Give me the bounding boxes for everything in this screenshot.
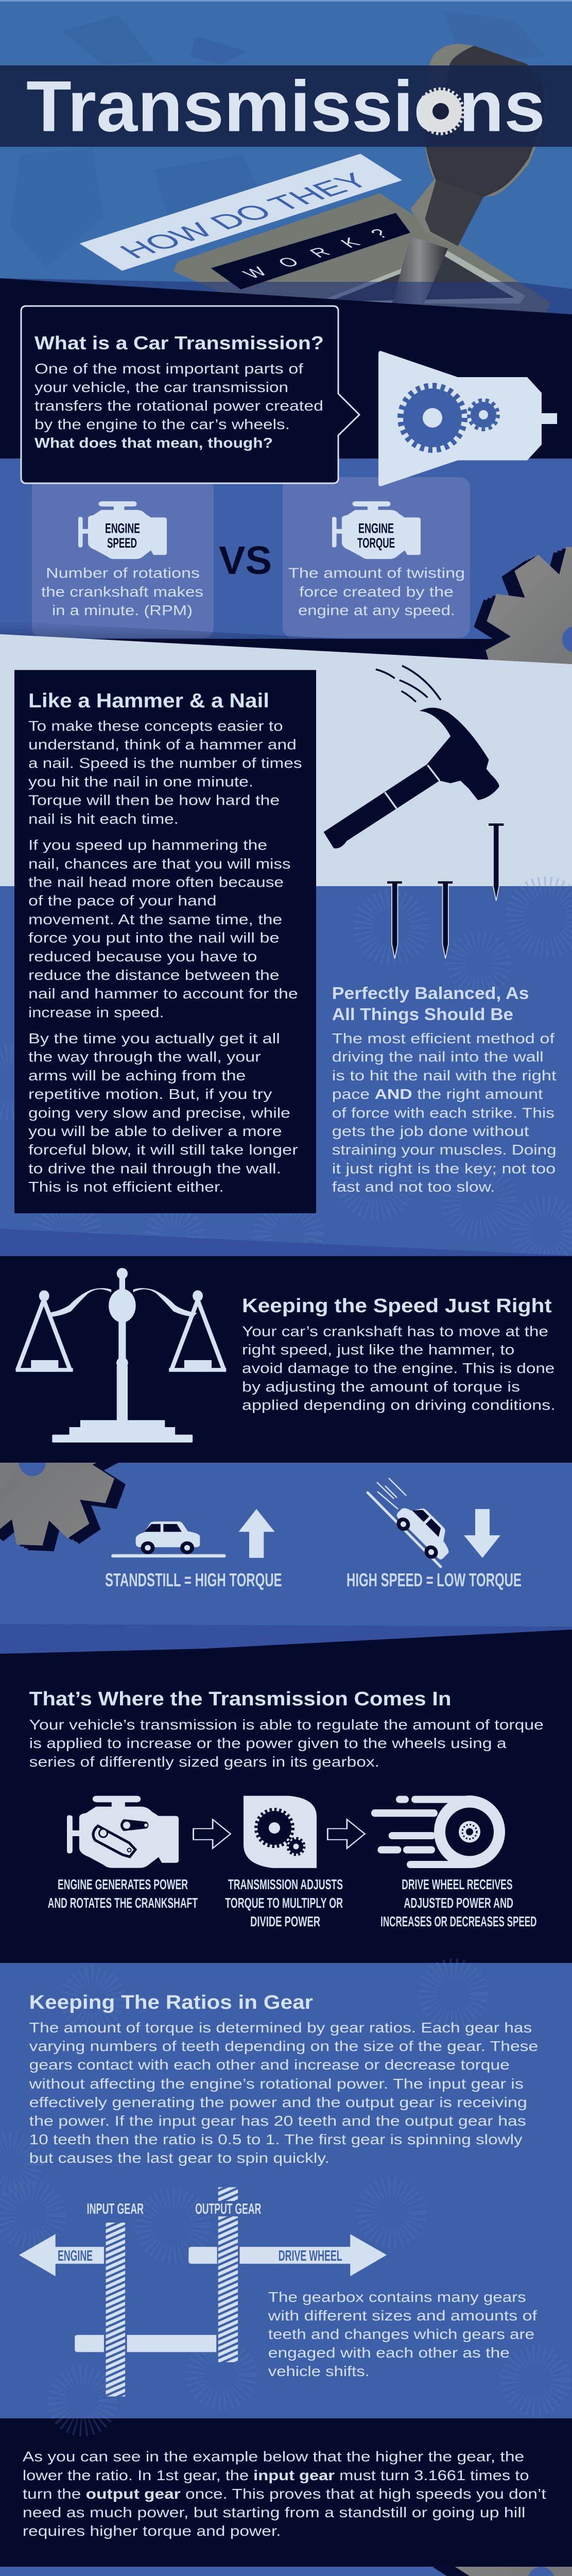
text: hammer paragraph three: arms will be aching from the bbox=[28, 1067, 246, 1083]
icon: transmission gears bbox=[244, 1796, 317, 1868]
text: perfectly balanced: Perfectly Balanced, As bbox=[332, 984, 529, 1003]
card: engine torque bbox=[283, 477, 470, 638]
card: engine speed bbox=[32, 477, 214, 638]
text: higher gear lower ratio: turn the output gear once. This proves that at high speeds you don’t bbox=[23, 2486, 546, 2502]
text: keeping the ratios in gear: the power. If the input gear has 20 teeth and the output gear has bbox=[29, 2113, 526, 2129]
diagram: input and output gears: OUTPUT GEAR bbox=[195, 2201, 261, 2217]
text: hammer paragraph three: forceful blow, it will still take longer bbox=[28, 1142, 298, 1158]
card: engine torque: engine at any speed. bbox=[298, 602, 455, 618]
caption: drive wheel receives: ADJUSTED POWER AND bbox=[404, 1895, 513, 1911]
card: engine torque: force created by the bbox=[299, 584, 454, 600]
subtitle: how do they bbox=[79, 154, 402, 271]
card: engine speed: in a minute. (RPM) bbox=[52, 602, 193, 618]
card: engine speed: Number of rotations bbox=[46, 565, 200, 581]
darker blue transition band bbox=[0, 1624, 572, 1664]
title band bbox=[0, 65, 572, 147]
text: keeping the speed just right: applied depending on driving conditions. bbox=[242, 1397, 556, 1413]
icon: metal gear right bbox=[474, 547, 572, 664]
arrow: transmission to drive wheel bbox=[327, 1820, 365, 1849]
blue speed vs torque section bbox=[0, 459, 572, 639]
callout: what is a car transmission: by the engine to the car’s wheels. bbox=[34, 416, 290, 432]
text: keeping the ratios in gear: 10 teeth then the ratio is 0.5 to 1. The first gear is spinning slowly bbox=[29, 2131, 523, 2147]
blue chart section bbox=[0, 2567, 572, 2576]
text: keeping the ratios in gear: gears contact with each other and increase or decrease torque bbox=[29, 2057, 510, 2073]
text: hammer paragraph three: This is not efficient either. bbox=[28, 1179, 224, 1195]
panel: like a hammer and a nail: Like a Hammer & a Nail bbox=[28, 690, 269, 712]
text: perfectly balanced: fast and not too slow. bbox=[332, 1179, 495, 1195]
diagram: input and output gears: ENGINE bbox=[58, 2248, 93, 2264]
card: engine speed: SPEED bbox=[107, 535, 137, 551]
text: perfectly balanced: driving the nail into the wall bbox=[332, 1049, 544, 1065]
text: hammer paragraph three: By the time you actually get it all bbox=[28, 1030, 280, 1046]
text: keeping the speed just right bbox=[242, 1295, 556, 1413]
callout: what is a car transmission: your vehicle, the car transmission bbox=[34, 379, 288, 395]
caption: engine generates power: ENGINE GENERATES POWER bbox=[58, 1876, 188, 1892]
subtitle: work bbox=[211, 213, 410, 290]
text: keeping the speed just right: by adjusting the amount of torque is bbox=[242, 1379, 520, 1395]
text: higher gear lower ratio: As you can see in the example below that the higher the gear, the bbox=[23, 2448, 524, 2465]
text: hammer paragraph three: you will be able to deliver a more bbox=[28, 1123, 282, 1139]
text: perfectly balanced: The most efficient method of bbox=[332, 1030, 554, 1046]
text: keeping the speed just right: right speed, just like the hammer, to bbox=[242, 1342, 514, 1358]
text: perfectly balanced bbox=[332, 984, 557, 1195]
callout: what is a car transmission: One of the most important parts of bbox=[34, 361, 303, 377]
text: keeping the speed just right: Your car’s crankshaft has to move at the bbox=[242, 1323, 548, 1339]
arrow: engine to transmission bbox=[194, 1820, 231, 1849]
text: hammer paragraph one: understand, think of a hammer and bbox=[28, 736, 297, 752]
text: gearbox description bbox=[268, 2289, 537, 2379]
text: hammer paragraph one: nail is hit each time. bbox=[28, 811, 179, 827]
text: perfectly balanced: is to hit the nail with the right bbox=[332, 1067, 557, 1083]
text: hammer paragraph one: To make these concepts easier to bbox=[28, 718, 283, 734]
icon: drive wheel bbox=[371, 1795, 505, 1868]
text: hammer paragraph one: Torque will then be how hard the bbox=[28, 792, 280, 808]
icon: gear shifter bbox=[175, 44, 549, 324]
icon: metal gear left bbox=[0, 1463, 126, 1551]
text: hammer paragraph one: a nail. Speed is the number of times bbox=[28, 755, 302, 771]
icon: engine with belts bbox=[67, 1796, 179, 1868]
gear bars and shafts bbox=[19, 2187, 387, 2397]
text: hammer paragraph three bbox=[28, 1030, 298, 1195]
text: higher gear lower ratio bbox=[23, 2448, 546, 2539]
caption: transmission adjusts bbox=[225, 1876, 343, 1929]
subtitle: work: WORK? bbox=[238, 226, 393, 281]
text: that's where the transmission comes in: Your vehicle’s transmission is able to regulate the amount of torque bbox=[29, 1717, 544, 1733]
caption: transmission adjusts: DIVIDE POWER bbox=[250, 1913, 320, 1929]
text: higher gear lower ratio: requires higher torque and power. bbox=[23, 2523, 281, 2539]
subtitle: how do they: HOW DO THEY bbox=[112, 168, 377, 263]
icon: car at high speed with down arrow bbox=[368, 1478, 500, 1567]
card: engine torque: The amount of twisting bbox=[288, 565, 465, 581]
text: keeping the ratios in gear: Keeping The Ratios in Gear bbox=[29, 1992, 313, 2013]
diagram: input and output gears bbox=[19, 2187, 387, 2397]
card: engine torque: TORQUE bbox=[357, 535, 395, 551]
vs label: VS bbox=[219, 538, 272, 583]
text: hammer paragraph two: movement. At the same time, the bbox=[28, 911, 282, 927]
navy transmission section bbox=[0, 1630, 572, 1963]
blue panel with gear pattern bbox=[0, 886, 572, 1260]
caption: drive wheel receives bbox=[380, 1876, 536, 1929]
icon: gearbox bbox=[378, 351, 557, 486]
blue torque section bbox=[0, 1463, 572, 1630]
text: perfectly balanced: it just right is the key; not too bbox=[332, 1160, 556, 1176]
darker blue transition band bbox=[0, 1229, 572, 1257]
text: hammer paragraph three: the way through the wall, your bbox=[28, 1049, 261, 1065]
card: engine speed: ENGINE bbox=[105, 520, 140, 536]
text: hammer paragraph two: If you speed up hammering the bbox=[28, 837, 267, 853]
icon: balance scale bbox=[15, 1268, 226, 1443]
text: hammer paragraph two: reduced because you have to bbox=[28, 948, 257, 964]
text: that's where the transmission comes in: That’s Where the Transmission Comes In bbox=[29, 1688, 452, 1710]
navy intro section bbox=[0, 278, 572, 459]
text: hammer paragraph two: of the pace of your hand bbox=[28, 892, 217, 908]
text: perfectly balanced: pace AND the right amount bbox=[332, 1086, 543, 1102]
callout: what is a car transmission bbox=[21, 306, 359, 483]
text: keeping the ratios in gear: The amount of torque is determined by gear ratios. Each gear has bbox=[29, 2020, 532, 2036]
text: perfectly balanced: straining your muscles. Doing bbox=[332, 1142, 557, 1158]
text: hammer paragraph two: force you put into the nail will be bbox=[28, 930, 279, 946]
panel: like a hammer and a nail bbox=[14, 670, 316, 1213]
text: higher gear lower ratio: need as much power, but starting from a standstill or going up hill bbox=[23, 2504, 525, 2520]
text: keeping the ratios in gear: without affecting the engine’s rotational power. The input gear is bbox=[28, 2076, 524, 2092]
text: that's where the transmission comes in: series of differently sized gears in its gearbox. bbox=[29, 1754, 379, 1770]
caption: engine generates power bbox=[48, 1876, 198, 1911]
diagram: input and output gears: INPUT GEAR bbox=[87, 2201, 144, 2217]
icon: metal gear chart corner bbox=[434, 2567, 572, 2576]
hero lower overlap bbox=[0, 278, 572, 319]
caption: transmission adjusts: TRANSMISSION ADJUSTS bbox=[228, 1876, 343, 1892]
text: hammer paragraph two: nail and hammer to account for the bbox=[28, 986, 298, 1002]
callout: what is a car transmission: transfers the rotational power created bbox=[34, 398, 323, 414]
text: keeping the speed just right: avoid damage to the engine. This is done bbox=[242, 1360, 554, 1376]
text: hammer paragraph three: repetitive motion. But, if you try bbox=[28, 1086, 272, 1102]
icon: hammer and nails bbox=[324, 666, 504, 959]
text: that's where the transmission comes in: is applied to increase or the power given to the wheels using a bbox=[29, 1735, 507, 1751]
text: hammer paragraph three: to drive the nail through the wall. bbox=[28, 1160, 281, 1176]
icon: gear in title bbox=[418, 89, 463, 134]
text: perfectly balanced: of force with each strike. This bbox=[332, 1105, 554, 1121]
text: hammer paragraph one: you hit the nail in one minute. bbox=[28, 774, 253, 789]
callout: what is a car transmission: What is a Car Transmission? bbox=[34, 332, 324, 353]
text: hammer paragraph three: going very slow and precise, while bbox=[28, 1105, 290, 1121]
diagram: input and output gears: DRIVE WHEEL bbox=[279, 2248, 342, 2264]
callout: what is a car transmission: What does that mean, though? bbox=[34, 435, 273, 451]
text: perfectly balanced: All Things Should Be bbox=[332, 1005, 513, 1024]
caption: transmission adjusts: TORQUE TO MULTIPLY OR bbox=[225, 1895, 343, 1911]
card: engine speed: the crankshaft makes bbox=[41, 584, 203, 600]
navy scale section bbox=[0, 1256, 572, 1463]
text: higher gear lower ratio: lower the ratio. In 1st gear, the input gear must turn 3.1661 times to bbox=[23, 2467, 529, 2483]
text: keeping the speed just right: Keeping the Speed Just Right bbox=[242, 1295, 552, 1317]
text: hammer paragraph two bbox=[28, 837, 298, 1020]
label: standstill equals high torque: STANDSTILL = HIGH TORQUE bbox=[105, 1569, 282, 1590]
blue ratios section with gear pattern bbox=[0, 1963, 572, 2427]
text: gearbox description: with different sizes and amounts of bbox=[268, 2308, 537, 2324]
card: engine torque: ENGINE bbox=[358, 520, 394, 536]
text: keeping the ratios in gear: effectively generating the power and the output gear is receiving bbox=[29, 2094, 527, 2110]
text: gearbox description: The gearbox contains many gears bbox=[268, 2289, 526, 2305]
icon: car at standstill with up arrow bbox=[111, 1509, 275, 1558]
text: hammer paragraph two: reduce the distance between the bbox=[28, 967, 279, 983]
text: perfectly balanced: gets the job done without bbox=[332, 1123, 529, 1139]
text: gearbox description: teeth and changes which gears are bbox=[268, 2326, 534, 2342]
icon: engine bbox=[332, 501, 421, 559]
text: gearbox description: vehicle shifts. bbox=[268, 2363, 370, 2379]
text: hammer paragraph two: the nail head more often because bbox=[28, 874, 284, 890]
text: hammer paragraph two: increase in speed. bbox=[28, 1004, 164, 1020]
title: Transmissions bbox=[26, 66, 545, 146]
light panel background bbox=[0, 634, 572, 886]
text: keeping the ratios in gear bbox=[28, 1992, 538, 2166]
icon: engine bbox=[78, 501, 167, 559]
text: hammer paragraph one bbox=[28, 718, 302, 827]
hero background bbox=[0, 0, 572, 330]
text: gearbox description: engaged with each other as the bbox=[268, 2345, 510, 2361]
caption: engine generates power: AND ROTATES THE CRANKSHAFT bbox=[48, 1895, 198, 1911]
text: keeping the ratios in gear: but causes the last gear to spin quickly. bbox=[29, 2150, 330, 2166]
text: that's where the transmission comes in bbox=[29, 1688, 544, 1770]
text: hammer paragraph two: nail, chances are that you will miss bbox=[28, 856, 290, 872]
shadow above light panel bbox=[0, 621, 572, 664]
text: keeping the ratios in gear: varying numbers of teeth depending on the size of the gear. These bbox=[29, 2038, 538, 2054]
